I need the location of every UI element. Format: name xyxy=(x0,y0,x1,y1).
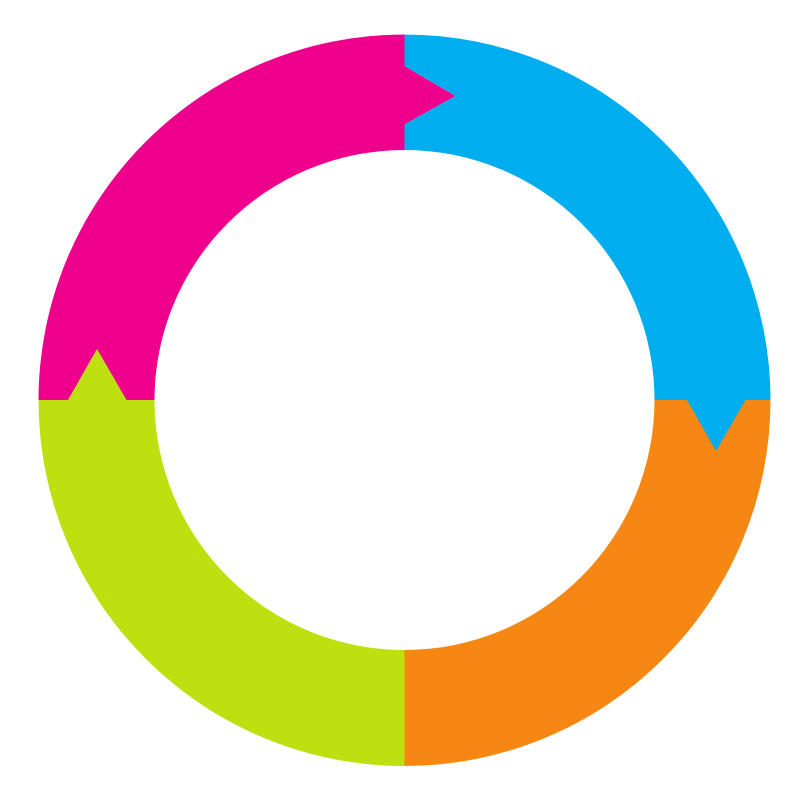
arrow segment: cyan blue, top right xyxy=(404,34,770,451)
arrow segment: orange, bottom right xyxy=(404,400,770,766)
arrow segment: magenta, top left xyxy=(38,34,456,400)
arrow segment: lime green, bottom left xyxy=(38,349,404,766)
